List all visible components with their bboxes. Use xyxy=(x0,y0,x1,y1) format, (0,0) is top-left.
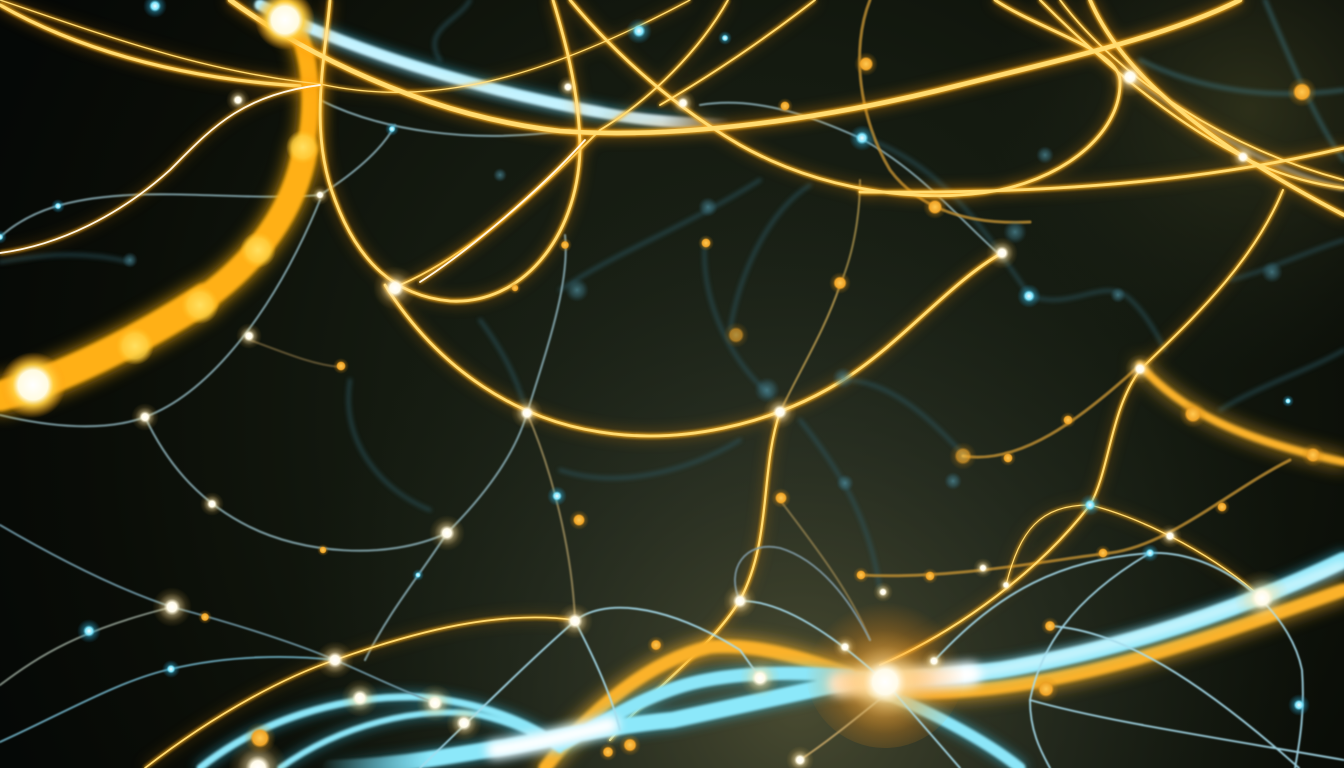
bright hero nodes on the arc xyxy=(0,0,315,418)
glowing nodes: amber xyxy=(198,52,1325,761)
dim out-of-focus nodes xyxy=(122,146,1283,492)
white-hot ribbon highlights xyxy=(300,25,1344,750)
thin cyan-white filaments lower area xyxy=(0,525,1344,768)
orange bokeh beads on the thick arc xyxy=(116,130,320,365)
orange flare at the central junction xyxy=(805,588,965,748)
thick pale-cyan ribbon top xyxy=(260,5,730,124)
muted blue-grey thin filaments xyxy=(0,77,1344,660)
thick orange arc from left xyxy=(0,8,310,396)
orange ribbons right and bottom xyxy=(545,365,1344,768)
bottom cyan ribbons xyxy=(200,560,1344,768)
glowing nodes: warm white xyxy=(131,57,1290,768)
muted amber mid-distance filaments xyxy=(860,0,1290,576)
far out-of-focus blue filaments xyxy=(0,0,1344,590)
white-hot fine filaments xyxy=(0,85,585,282)
